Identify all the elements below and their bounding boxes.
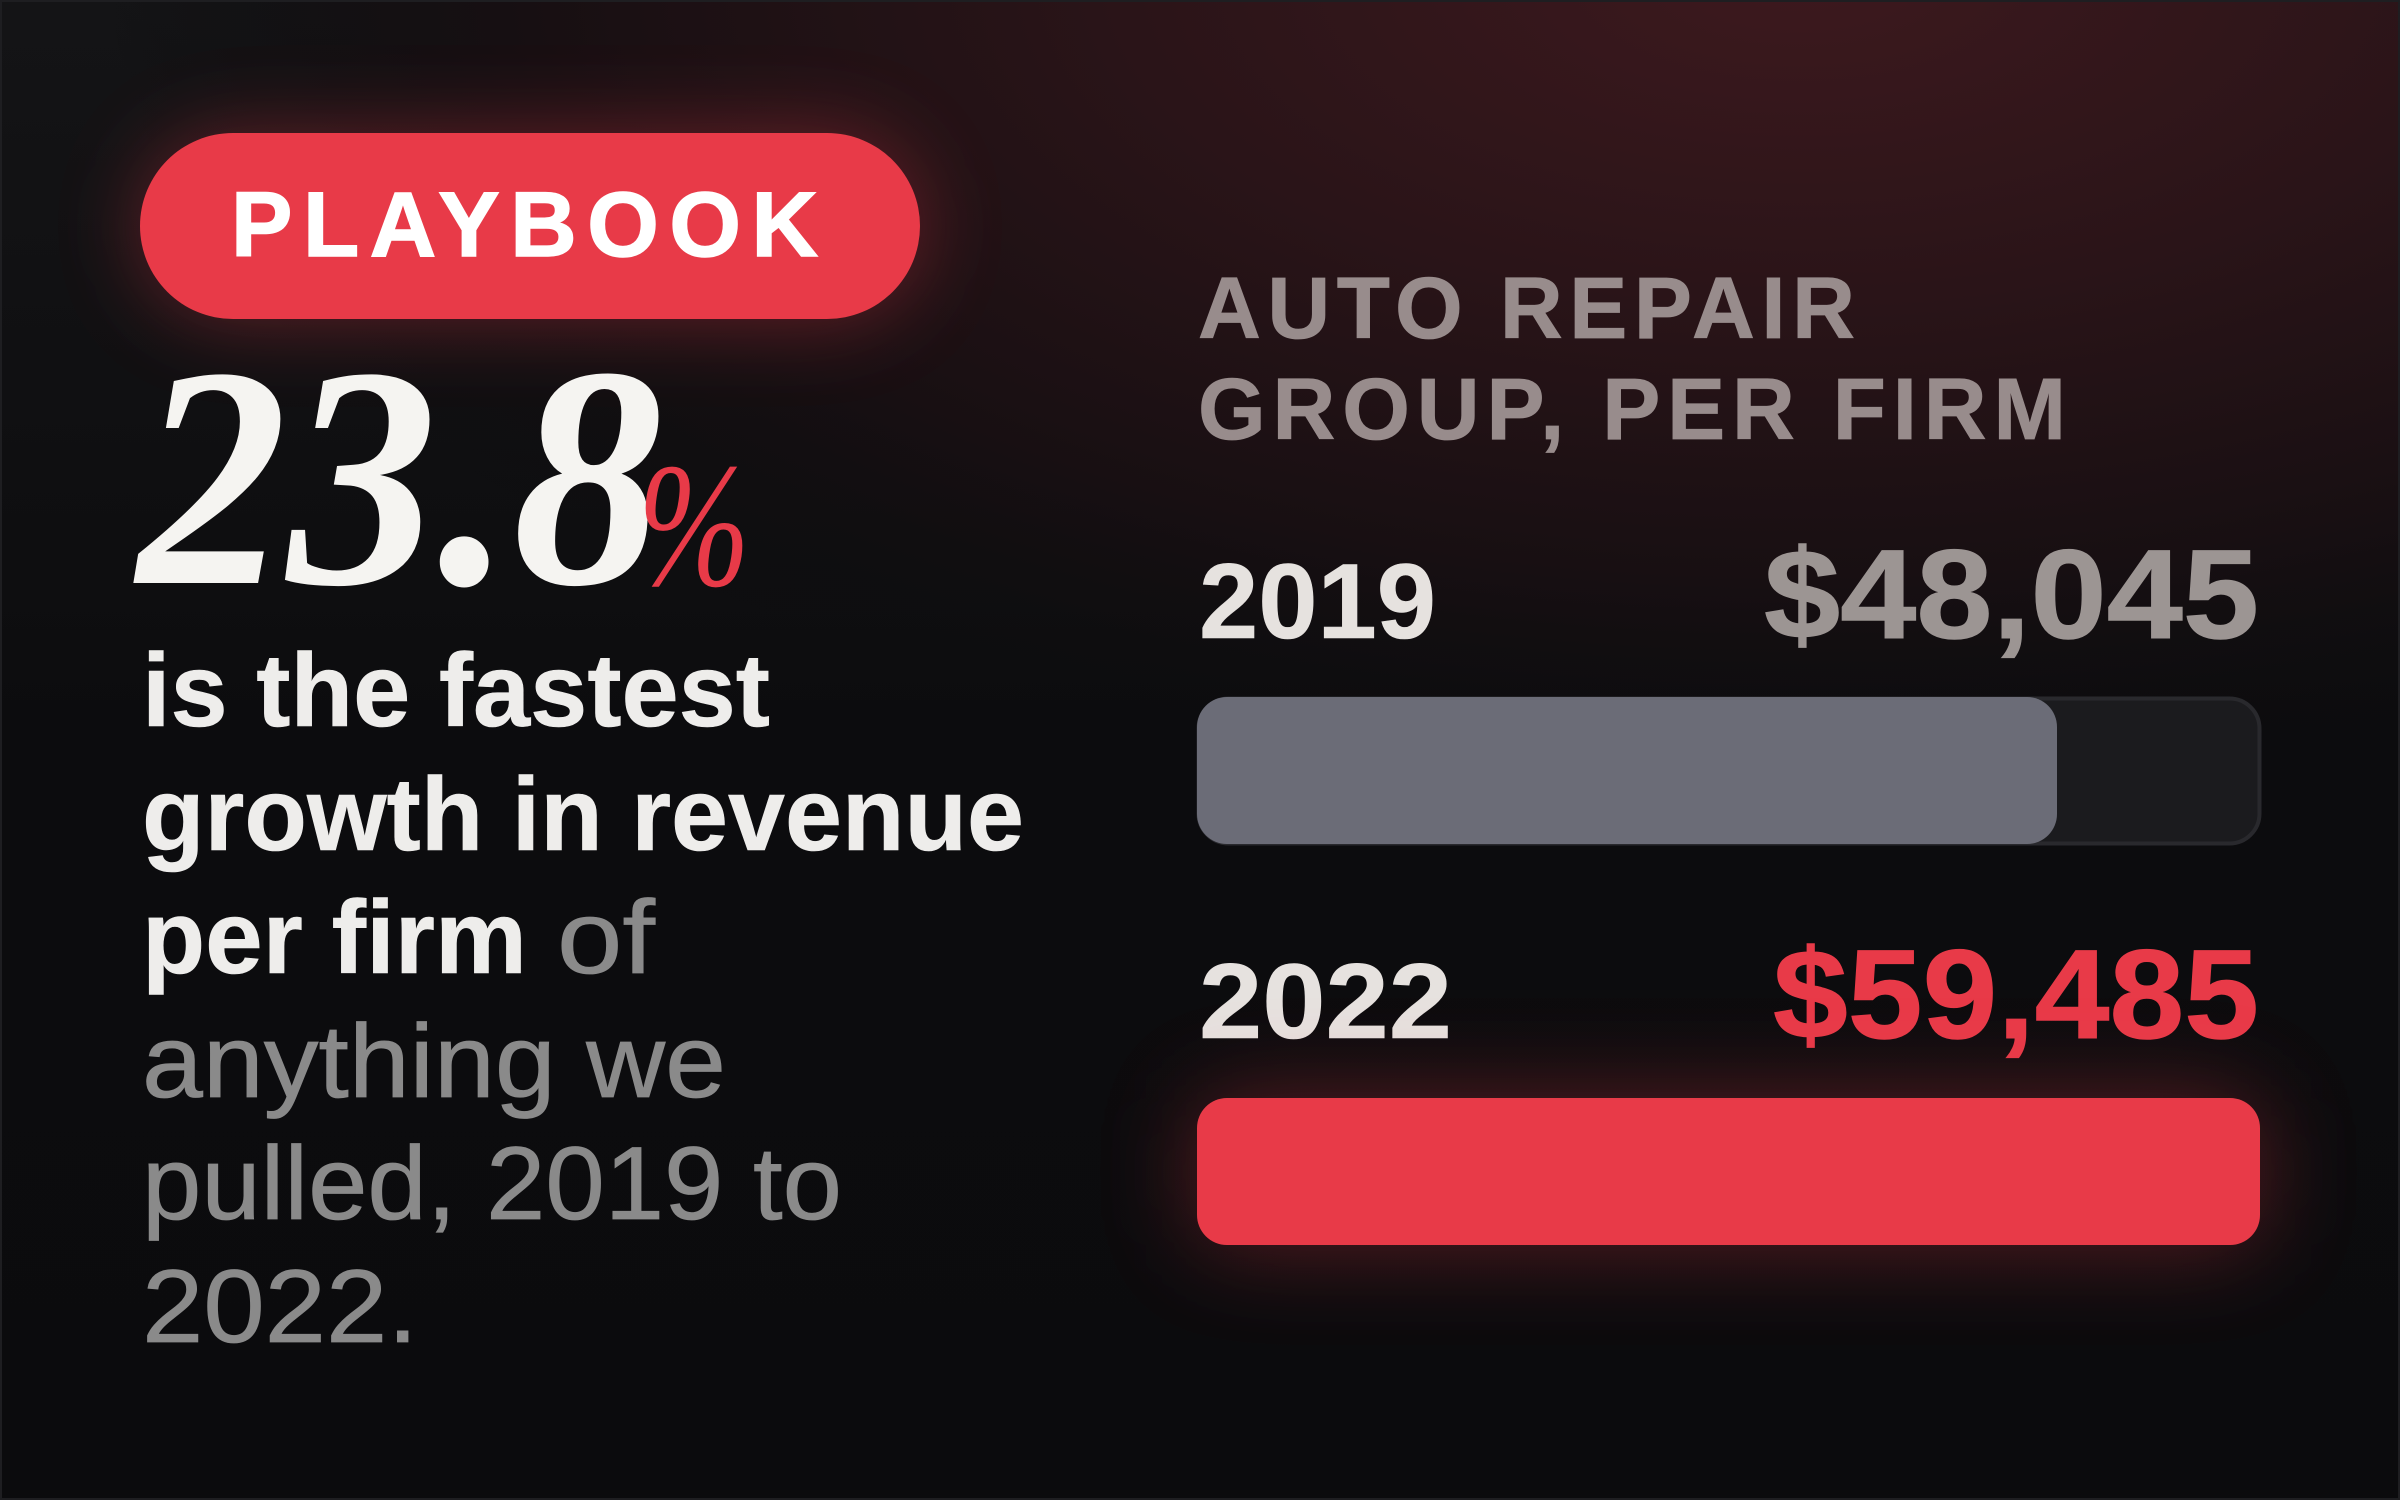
chart heading: GROUP, PER FIRM: [1198, 361, 2066, 458]
big stat: 23.8%: %: [638, 426, 750, 624]
value 2022: $59,485: [1773, 923, 2259, 1065]
big stat: 23.8%: 23.8: [132, 303, 663, 652]
row: 2019: [1197, 523, 2260, 844]
statement text: is the fastest: [142, 633, 770, 749]
statement text: anything we: [142, 1004, 726, 1120]
year label 2019: 2019: [1199, 541, 1436, 661]
badge: playbook: [140, 133, 920, 319]
chart heading: AUTO REPAIR: [1198, 260, 1855, 357]
chart heading: [1198, 260, 2066, 458]
row: 2022: [1197, 923, 2260, 1245]
statement text: [142, 633, 1024, 1365]
bar glow 2022: [1197, 1098, 2260, 1245]
bar fill 2022: [1197, 1098, 2260, 1245]
badge: playbook: PLAYBOOK: [231, 174, 818, 276]
bar fill 2019: [1197, 697, 2057, 844]
statement text: of: [557, 880, 656, 996]
year label 2022: 2022: [1199, 941, 1452, 1061]
statement text: growth in revenue: [142, 757, 1024, 873]
bar track 2019: [1198, 698, 2260, 844]
statement text: per firm: [142, 880, 527, 996]
value 2019: $48,045: [1764, 523, 2259, 665]
statement text: pulled, 2019 to: [142, 1126, 842, 1242]
statement text: 2022.: [142, 1249, 418, 1365]
